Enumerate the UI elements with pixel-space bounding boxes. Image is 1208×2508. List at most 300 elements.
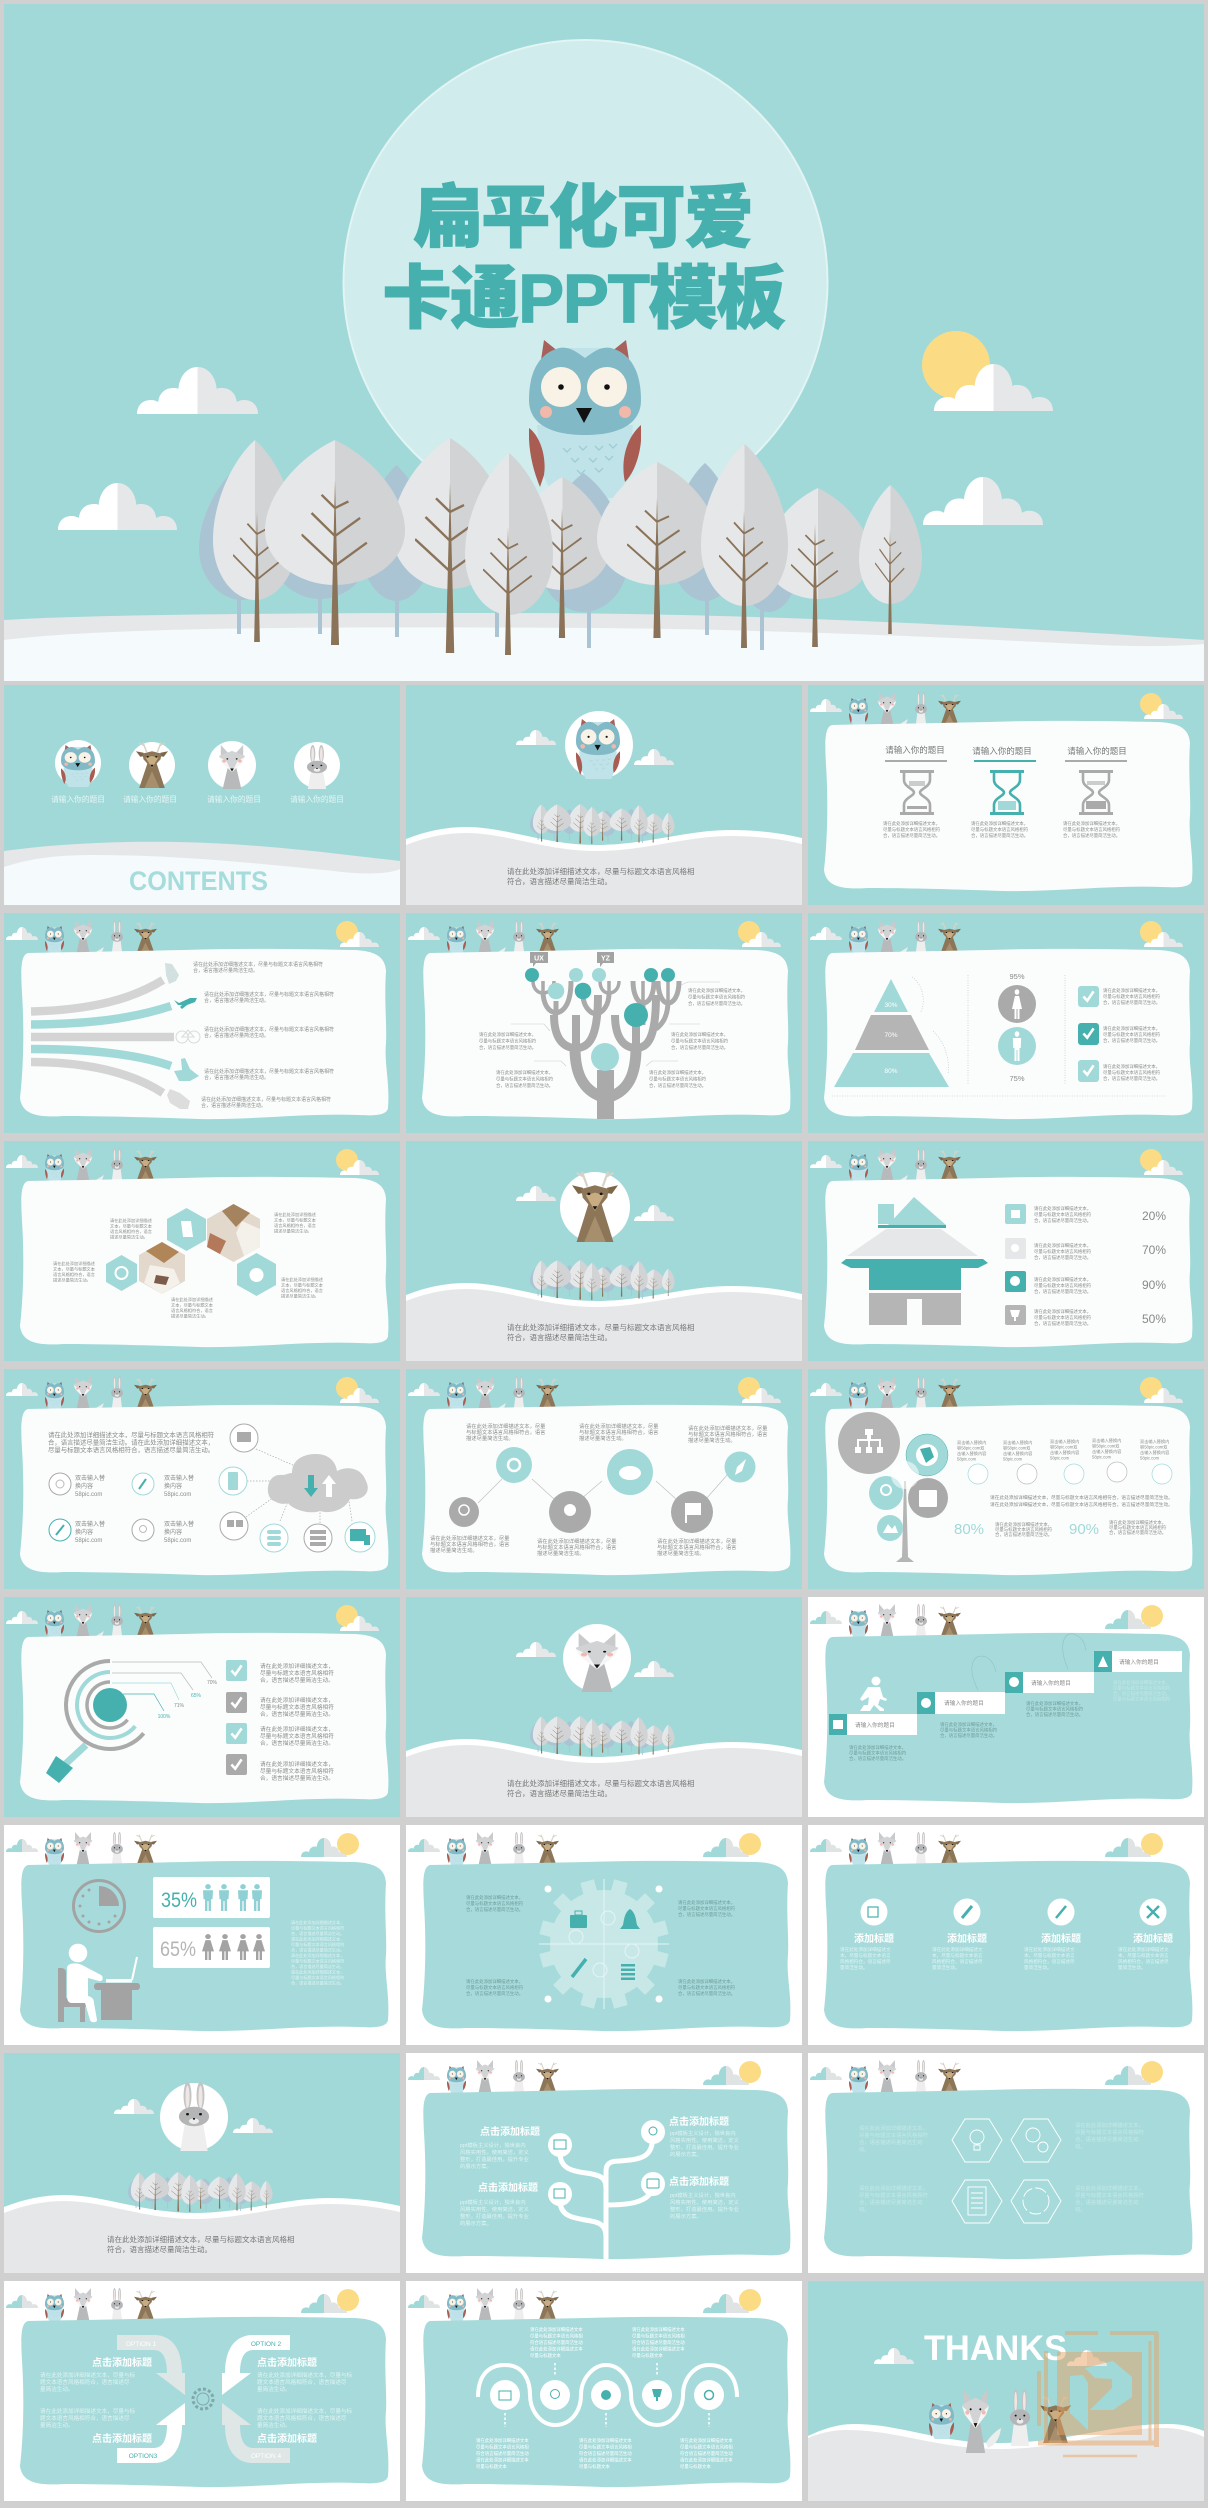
column 3 — [1063, 746, 1127, 839]
slide background — [406, 1141, 802, 1361]
ribbon text 3: 合，语言描述尽量简洁生动。 — [204, 1032, 269, 1039]
tool 1 — [840, 1898, 894, 1971]
text bottom left: 合，语言描述尽量简洁生动。 — [466, 1990, 523, 1997]
description text: 符合，语言描述尽量简洁生动。 — [507, 1332, 612, 1342]
deer character — [572, 1172, 618, 1242]
step text 4: 尽量与标题文本语言风格相符 — [1113, 1696, 1171, 1702]
checklist item 1: 合，语言描述尽量简洁生动。 — [1103, 999, 1160, 1006]
block upper left: ppt模板主义设计，独世良内 — [460, 2141, 526, 2149]
column text: 请在此处添加详细描述文本， — [291, 1968, 344, 1974]
cloud left — [874, 2348, 914, 2364]
check item 2: 请在此处添加详细描述文本， — [260, 1696, 334, 1704]
rabbit character — [1010, 2389, 1030, 2446]
block 3: 题文本语言风格相符合，语言描述尽 — [40, 2414, 130, 2422]
header animals, sun and clouds — [6, 1148, 379, 1182]
hero moon circle — [344, 40, 828, 524]
text top 2: 请在此处添加详细描述文本，尽量 — [579, 1422, 659, 1430]
timeline node 2 — [540, 2380, 570, 2410]
step 4: 请输入你的题目 — [1119, 1658, 1159, 1666]
hex text left bottom: 请在此处添加详细描述 — [53, 1260, 96, 1267]
header animals, sun and clouds — [6, 2288, 359, 2322]
tool 2: 本，尽量与标题文本语言 — [932, 1952, 983, 1959]
slide: section fox — [406, 1597, 802, 1817]
checklist item 2 — [1078, 1023, 1161, 1045]
tree text left middle: 请在此处添加详细描述文本， — [479, 1031, 536, 1038]
icon: cloud left lower — [58, 483, 177, 530]
outlined icons row — [968, 1462, 1172, 1484]
hexagon: document — [952, 2180, 1002, 2223]
slide: contents — [4, 685, 400, 905]
block lower right: ppt模板主义设计，独世良内 — [670, 2191, 736, 2199]
block upper left: 点击添加标题 — [480, 2125, 540, 2138]
step text 2: 尽量与标题文本语言风格相符 — [940, 1726, 998, 1734]
row 3: 合，语言描述尽量简洁生动。 — [1034, 1288, 1091, 1295]
top text 2: 符合语言描述尽量简洁生动 — [632, 2339, 685, 2346]
slide background — [406, 685, 802, 905]
owl character — [929, 2403, 954, 2439]
item 1: 58pic.com — [75, 1492, 102, 1498]
icon: cloud right upper — [934, 364, 1053, 411]
person at desk — [58, 1944, 140, 2022]
magnifier leader lines and values: 71% — [174, 1703, 185, 1709]
panel: teal card — [20, 2317, 388, 2487]
panel: teal card — [422, 1861, 790, 2031]
text lower left: 请在此处添加详细描述文本， — [859, 2184, 928, 2192]
slide: transport ribbons — [4, 913, 400, 1133]
column text 3: 双击输入替换内 — [1050, 1438, 1079, 1445]
check item 4: 尽量与标题文本语言风格相符 — [260, 1767, 334, 1775]
check item 3 — [226, 1723, 334, 1747]
tool 3: 本，尽量与标题文本语言 — [1024, 1952, 1075, 1959]
bottom text 2: 请在此处添加详细描述文本 — [579, 2456, 632, 2464]
column 3: 请输入你的题目 — [1067, 746, 1127, 756]
hexagon photo bottom — [139, 1242, 185, 1294]
panel: white card — [824, 949, 1192, 1119]
panel: hero cover slide — [4, 4, 1204, 681]
bubble tree — [838, 1412, 948, 1562]
connector lines — [478, 1474, 728, 1503]
ribbon text 2: 请在此处添加详细描述文本，尽量与标题文本语言风格相符 — [204, 991, 334, 998]
hero title: 扁平化可爱 — [414, 179, 754, 256]
text bottom left: 请在此处添加详细描述文本， — [466, 1978, 523, 1985]
check item 3: 合，语言描述尽量简洁生动。 — [260, 1739, 334, 1747]
ribbon chart — [31, 980, 174, 1093]
hex text left bottom: 语言风格相符合，语言 — [53, 1271, 95, 1278]
block 3: 点击添加标题 — [92, 2432, 152, 2445]
row 2: 合，语言描述尽量简洁生动。 — [1034, 1254, 1091, 1261]
slide: process circles — [406, 1369, 802, 1589]
hex text bottom: 请在此处添加详细描述 — [171, 1296, 214, 1303]
device: database — [260, 1524, 288, 1552]
hexagon: bulb — [952, 2119, 1002, 2162]
header animals, sun and clouds — [408, 1832, 761, 1866]
deer character — [1040, 2396, 1071, 2443]
slide background — [4, 2281, 400, 2501]
text bottom 1: 与标题文本语言风格相符合，语言 — [430, 1540, 510, 1548]
tree branches — [533, 981, 679, 1119]
hex text bottom: 文本，尽量与标题文本 — [171, 1302, 214, 1308]
step text 2: 合，语言描述尽量简洁生动。 — [940, 1732, 997, 1739]
slide: outlined hexagons — [808, 2053, 1204, 2273]
block 4: 题文本语言风格相符合，语言描述尽 — [257, 2414, 347, 2422]
column text: 合，语言描述尽量简洁生动。 — [291, 1980, 344, 1986]
wide paragraph: 请在此处添加详细描述文本，尽量与标题文本语言风格相符合，语言描述尽量简洁生动。 — [990, 1494, 1173, 1501]
row 2: 尽量与标题文本语言风格相符 — [1034, 1248, 1092, 1255]
top text 1: 尽量与标题文本 — [530, 2352, 561, 2359]
tool 4 — [1118, 1898, 1173, 1971]
item 3: 58pic.com — [75, 1538, 102, 1544]
stat 80%: 合，语言描述尽量简洁生动。 — [995, 1531, 1052, 1538]
header animals, sun and clouds — [810, 1148, 1183, 1182]
tool 2: 量简洁生动。 — [932, 1964, 960, 1971]
panel: white card — [422, 949, 790, 1119]
tree text right top: 尽量与标题文本语言风格相符 — [688, 994, 746, 1000]
column 2 — [971, 746, 1036, 839]
block upper left: 的展示方案。 — [460, 2162, 492, 2170]
bottom text 1: 请在此处添加详细描述文本 — [476, 2437, 529, 2444]
text upper right: 动。 — [1075, 2143, 1086, 2150]
cloud right — [634, 749, 674, 765]
bottom text 1: 尽量与标题文本语言风格相 — [476, 2444, 529, 2450]
block 2: 量简洁生动。 — [257, 2385, 291, 2393]
block 1: 点击添加标题 — [92, 2356, 152, 2369]
tree text left bottom: 请在此处添加详细描述文本， — [496, 1069, 553, 1076]
option 3 arrow — [117, 2403, 185, 2463]
slide: thanks — [808, 2281, 1204, 2501]
icon: center gear — [193, 2389, 213, 2409]
stat: women 95% — [998, 972, 1036, 1023]
text upper left: 请在此处添加详细描述文本， — [859, 2124, 928, 2132]
icon: list — [621, 1964, 635, 1980]
node icon lower right — [641, 2172, 665, 2196]
cloud right — [634, 1205, 674, 1221]
watermark stamp — [1038, 2333, 1158, 2456]
tool 4: 本，尽量与标题文本语言 — [1118, 1952, 1169, 1959]
slide background — [406, 1825, 802, 2045]
column text 2: 58pic.com — [1003, 1456, 1023, 1462]
slide: bubble tree stats — [808, 1369, 1204, 1589]
node icon lower left — [548, 2182, 572, 2206]
icon: airplane — [174, 998, 197, 1009]
item 2 — [132, 1473, 194, 1498]
row 4: 50% — [1142, 1312, 1166, 1326]
wave line — [478, 2365, 737, 2425]
stat 80%: 尽量与标题文本语言风格相符 — [995, 1526, 1053, 1533]
item 3: 双击输入替 — [75, 1520, 105, 1528]
row 3: 90% — [1142, 1278, 1166, 1292]
block 1: 请在此处添加详细描述文本，尽量与标 — [40, 2371, 136, 2379]
icon: car — [167, 1089, 190, 1109]
block 2 — [257, 2356, 353, 2393]
text top 2: 描述尽量简洁生动。 — [579, 1434, 627, 1442]
device: desktop — [345, 1522, 375, 1552]
ribbon text 2: 合，语言描述尽量简洁生动。 — [204, 997, 269, 1004]
timeline node 4 — [642, 2380, 672, 2410]
tree text right top: 合，语言描述尽量简洁生动。 — [688, 1000, 745, 1007]
panel: teal card — [20, 1861, 388, 2031]
text top left: 请在此处添加详细描述文本， — [466, 1894, 523, 1901]
description text: 符合，语言描述尽量简洁生动。 — [107, 2244, 212, 2254]
column text 1: 58pic.com — [957, 1456, 977, 1462]
bottom text 3: 请在此处添加详细描述文本 — [680, 2437, 733, 2444]
tree text left bottom: 合，语言描述尽量简洁生动。 — [496, 1082, 553, 1089]
tool 4: 量简洁生动。 — [1118, 1964, 1146, 1971]
text top 3: 描述尽量简洁生动。 — [688, 1436, 736, 1444]
bottom text 3: 符合语言描述尽量简洁生动 — [680, 2450, 733, 2457]
node: pin — [549, 1491, 591, 1533]
option 3 arrow: OPTION3 — [129, 2453, 158, 2460]
block 1: 量简洁生动。 — [40, 2385, 74, 2393]
slide background — [808, 2281, 1204, 2501]
header animals, sun and clouds — [6, 920, 379, 954]
icon: yellow sun — [922, 331, 990, 399]
column text 1: 击输入替换内容 — [957, 1450, 986, 1457]
item: owl — [51, 740, 105, 804]
stat 90% — [1069, 1519, 1167, 1538]
header animals, sun and clouds — [810, 692, 1183, 726]
hex text right bottom: 描述尽量简洁生动。 — [281, 1292, 319, 1300]
block upper left: 整形，打造最佳用。提升专业 — [460, 2155, 529, 2163]
grey hill — [406, 1289, 802, 1367]
hexagon icon right — [237, 1253, 276, 1296]
ribbon text 4: 请在此处添加详细描述文本，尽量与标题文本语言风格相符 — [204, 1068, 334, 1075]
step text 4: 请在此处添加详细描述文本， — [1113, 1679, 1170, 1686]
slide: house chart — [808, 1141, 1204, 1361]
checklist item 1: 请在此处添加详细描述文本， — [1103, 987, 1160, 994]
block lower right: 整形，打造最佳用。提升专业 — [670, 2205, 739, 2213]
step text 1: 请在此处添加详细描述文本， — [849, 1744, 906, 1751]
header animals, sun and clouds — [810, 1376, 1183, 1410]
hexagon photo top — [207, 1204, 260, 1262]
step text 3: 请在此处添加详细描述文本， — [1026, 1700, 1083, 1707]
tool 3: 风格相符合，语言描述尽 — [1024, 1958, 1075, 1965]
white circle — [565, 711, 633, 779]
text lower right: 合，语言描述尽量简洁生动 — [1075, 2198, 1139, 2206]
checklist item 3: 请在此处添加详细描述文本， — [1103, 1063, 1160, 1070]
cloud left — [516, 1186, 556, 1201]
tool 1: 本，尽量与标题文本语言 — [840, 1952, 891, 1959]
item: deer: 请输入你的题目 — [123, 794, 177, 804]
item 1 — [49, 1473, 105, 1498]
icon: pale sailboat — [165, 963, 179, 984]
hero ground grey hill — [4, 613, 1204, 681]
stat: women 95%: 95% — [1009, 972, 1025, 981]
block 4: 点击添加标题 — [257, 2432, 317, 2445]
column text 2: 容58pic.com双 — [1003, 1444, 1031, 1452]
column 1: 尽量与标题文本语言风格相符 — [883, 826, 941, 833]
check item 2 — [226, 1692, 334, 1718]
checklist item 2: 合，语言描述尽量简洁生动。 — [1103, 1037, 1160, 1044]
description text: 请在此处添加详细描述文本，尽量与标题文本语言风格相 — [507, 1778, 694, 1788]
text top left: 合，语言描述尽量简洁生动。 — [466, 1906, 523, 1913]
bottom text 2: 符合语言描述尽量简洁生动 — [579, 2450, 632, 2457]
row 3: 尽量与标题文本语言风格相符 — [1034, 1282, 1092, 1289]
owl character — [529, 340, 641, 498]
item: fox — [207, 741, 261, 804]
dashed connectors — [505, 2363, 709, 2427]
top text 1: 请在此处添加详细描述文本 — [530, 2346, 583, 2352]
slide background — [808, 913, 1204, 1133]
item 1: 换内容 — [75, 1482, 93, 1490]
item: rabbit: 请输入你的题目 — [290, 794, 344, 804]
tool 3: 请在此处添加详细描述文 — [1024, 1946, 1075, 1953]
slide: four options — [4, 2281, 400, 2501]
step text 2: 请在此处添加详细描述文本， — [940, 1721, 997, 1728]
owl character — [576, 719, 620, 779]
step 1: 请输入你的题目 — [855, 1721, 895, 1729]
icon: cloud left upper — [137, 367, 258, 414]
panel: white card — [20, 1405, 388, 1575]
dashed connectors — [246, 1449, 352, 1523]
slide background — [4, 1369, 400, 1589]
hex text right top: 请在此处添加详细描述 — [274, 1211, 317, 1218]
tool 1: 风格相符合，语言描述尽 — [840, 1958, 891, 1965]
snow hill — [4, 855, 400, 905]
panel: teal card — [824, 1633, 1192, 1803]
block 3: 请在此处添加详细描述文本，尽量与标 — [40, 2407, 136, 2415]
slide: four tools — [808, 1825, 1204, 2045]
slide background — [808, 1141, 1204, 1361]
hexagon: gears — [1011, 2119, 1061, 2162]
panel: teal card — [422, 2317, 790, 2487]
intro paragraph: 尽量与标题文本语言风格相符合，语言描述尽量简洁生动。 — [48, 1445, 214, 1454]
curved arrows — [972, 1634, 1086, 1690]
white circle — [560, 1172, 630, 1242]
tool 4: 风格相符合，语言描述尽 — [1118, 1958, 1169, 1965]
hex text right bottom: 请在此处添加详细描述 — [281, 1276, 324, 1283]
slide background — [406, 2281, 802, 2501]
header animals, sun and clouds — [408, 1376, 781, 1410]
text bottom right: 尽量与标题文本语言风格相符 — [678, 1984, 736, 1991]
hexagon icon left — [106, 1255, 137, 1291]
tree text right top: 请在此处添加详细描述文本， — [688, 987, 745, 994]
column 2: 请输入你的题目 — [972, 746, 1032, 756]
item 4: 换内容 — [164, 1528, 182, 1536]
hex text left top: 文本，尽量与标题文本 — [110, 1222, 153, 1230]
snow band — [406, 1739, 802, 1817]
bottom text 3: 请在此处添加详细描述文本 — [680, 2456, 733, 2464]
snow band — [406, 827, 802, 905]
text top 3: 请在此处添加详细描述文本，尽量 — [688, 1424, 768, 1432]
column 2: 请在此处添加详细描述文本， — [971, 820, 1028, 827]
checklist item 3 — [1078, 1060, 1161, 1082]
top text 1: 请在此处添加详细描述文本 — [530, 2326, 583, 2333]
grey hill — [406, 833, 802, 911]
text top right: 尽量与标题文本语言风格相符 — [678, 1905, 736, 1912]
slide background — [808, 1825, 1204, 2045]
cloud left — [516, 1642, 556, 1657]
header animals, sun and clouds — [408, 2288, 761, 2322]
item 3 — [49, 1519, 105, 1544]
header animals, sun and clouds — [810, 1832, 1163, 1866]
column text: 合，语言描述尽量简洁生动。 — [291, 1930, 344, 1936]
step text 3: 尽量与标题文本语言风格相符 — [1026, 1706, 1084, 1712]
row 1 — [1005, 1204, 1166, 1224]
column text 5: 双击输入替换内 — [1140, 1438, 1169, 1445]
step 2: 请输入你的题目 — [944, 1699, 984, 1707]
pyramid chart — [834, 979, 949, 1087]
block upper right: 的展示方案。 — [670, 2150, 702, 2158]
text top 2: 与标题文本语言风格相符合，语言 — [579, 1428, 659, 1436]
slide background — [4, 1825, 400, 2045]
hero title: 卡通PPT模板 — [382, 260, 786, 337]
check item 4 — [226, 1754, 334, 1782]
icon: cloud right lower — [923, 477, 1043, 525]
cloud right — [233, 2118, 273, 2133]
text bottom right: 请在此处添加详细描述文本， — [678, 1978, 735, 1985]
timeline node 1 — [490, 2380, 520, 2410]
forest — [128, 2172, 273, 2212]
column 3: 尽量与标题文本语言风格相符 — [1063, 826, 1121, 833]
tool 3: 添加标题 — [1041, 1932, 1081, 1945]
tool 1: 请在此处添加详细描述文 — [840, 1946, 891, 1953]
checklist item 2: 请在此处添加详细描述文本， — [1103, 1025, 1160, 1032]
hex text right bottom: 语言风格相符合，语言 — [281, 1287, 323, 1294]
tool 3 — [1024, 1898, 1081, 1971]
step 3 — [1005, 1672, 1094, 1693]
stat 90%: 合，语言描述尽量简洁生动。 — [1109, 1529, 1166, 1536]
check item 3: 尽量与标题文本语言风格相符 — [260, 1732, 334, 1740]
column text 2: 击输入替换内容 — [1003, 1450, 1032, 1457]
slide: white branching tree — [406, 2053, 802, 2273]
row 4: 请在此处添加详细描述文本， — [1034, 1308, 1091, 1315]
block lower left: ppt模板主义设计，独世良内 — [460, 2198, 526, 2206]
column text 5: 容58pic.com双 — [1140, 1444, 1168, 1450]
ribbon text 4: 合，语言描述尽量简洁生动。 — [204, 1074, 269, 1081]
text upper right: 请在此处添加详细描述文本， — [1075, 2121, 1144, 2129]
panel: white card — [20, 1177, 388, 1347]
stat 90%: 请在此处添加详细描述文本， — [1109, 1519, 1166, 1526]
slide background — [4, 913, 400, 1133]
slide background — [808, 2053, 1204, 2273]
rabbit character — [179, 2082, 209, 2151]
tree text right middle: 尽量与标题文本语言风格相符 — [671, 1038, 729, 1044]
stat card 35% — [153, 1877, 270, 1918]
hex text bottom: 语言风格相符合，语言 — [171, 1307, 213, 1314]
tool 4: 添加标题 — [1133, 1932, 1173, 1945]
ribbon text 1: 合，语言描述尽量简洁生动。 — [193, 967, 258, 974]
column text: 尽量与标题文本语言风格相符 — [291, 1958, 344, 1964]
option 2 arrow — [222, 2335, 290, 2395]
row 3: 请在此处添加详细描述文本， — [1034, 1276, 1091, 1283]
block upper left — [460, 2125, 540, 2170]
step 1 — [829, 1714, 917, 1735]
block 1: 题文本语言风格相符合，语言描述尽 — [40, 2378, 130, 2386]
house illustration — [841, 1197, 988, 1325]
text top right: 合，语言描述尽量简洁生动。 — [678, 1911, 735, 1918]
tool 2 — [932, 1898, 987, 1971]
column text: 合，语言描述尽量简洁生动。 — [291, 1963, 344, 1969]
snow band — [808, 2424, 1204, 2501]
tool 2: 风格相符合，语言描述尽 — [932, 1958, 983, 1965]
pyramid chart: 70% — [884, 1032, 898, 1039]
tool 3: 量简洁生动。 — [1024, 1964, 1052, 1971]
slide: section owl — [406, 685, 802, 905]
ribbon text 1: 请在此处添加详细描述文本，尽量与标题文本语言风格相符 — [193, 961, 323, 968]
block upper right — [669, 2115, 740, 2158]
text bottom 2: 描述尽量简洁生动。 — [537, 1549, 585, 1557]
slide: cloud network — [4, 1369, 400, 1589]
slide background — [808, 685, 1204, 905]
item: rabbit — [290, 742, 344, 804]
top text 2: 尽量与标题文本 — [632, 2352, 663, 2359]
forest front row — [213, 438, 922, 655]
block lower right — [669, 2175, 740, 2220]
block 3 — [40, 2407, 152, 2445]
header animals, sun and clouds — [810, 1604, 1163, 1638]
header animals, sun and clouds — [6, 1832, 359, 1866]
step 4 — [1094, 1651, 1182, 1672]
